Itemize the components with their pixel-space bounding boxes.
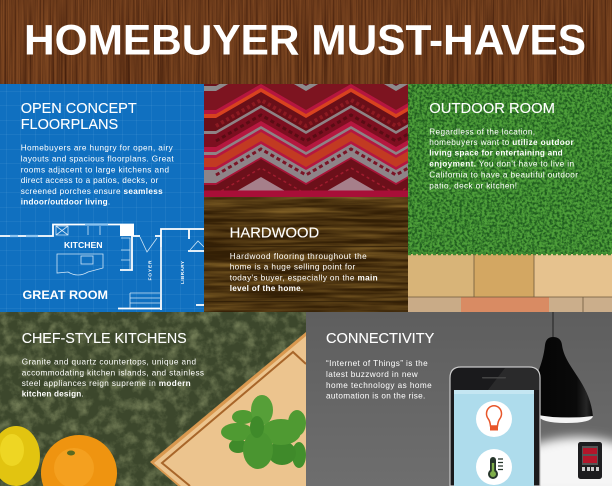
room labels: LIBRARY (180, 260, 186, 284)
panel: chef-style kitchens (0, 312, 306, 486)
room labels: GREAT ROOM (22, 290, 108, 302)
heading: CONNECTIVITY (326, 331, 435, 347)
smartphone (450, 367, 540, 486)
panel: patterned rug (171, 52, 576, 337)
body text: patio, deck or kitchen! (429, 181, 517, 190)
pendant lamp (530, 312, 612, 486)
body text (21, 144, 174, 207)
body text: enjoyment. You don't have to live in (429, 160, 574, 169)
smart thermostat (578, 442, 602, 479)
body text: accommodating kitchen islands, and stainless (22, 368, 204, 377)
body text: Granite and quartz countertops, unique and (22, 357, 196, 366)
body text: steel appliances reign supreme in modern (22, 379, 191, 388)
panel: hardwood (204, 197, 408, 312)
body text: homebuyers want to utilize outdoor (429, 138, 575, 147)
body text (429, 127, 578, 190)
body text: living space for entertaining and (429, 149, 563, 158)
panel: open concept floorplans (0, 84, 204, 312)
panel: outdoor room (408, 84, 612, 312)
body text: home is a huge selling point for (230, 263, 355, 272)
heading: OPEN CONCEPT (21, 101, 137, 117)
body text: kitchen design. (22, 390, 84, 399)
body text: rooms adjacent to large kitchens and (21, 165, 169, 174)
stone patio (408, 254, 612, 312)
body text: “Internet of Things” is the (326, 359, 428, 368)
body text: automation is on the rise. (326, 392, 425, 401)
heading: HARDWOOD (230, 225, 319, 241)
body text: indoor/outdoor living. (21, 198, 110, 207)
panel: connectivity (306, 312, 612, 486)
title: HOMEBUYER MUST-HAVES (24, 16, 586, 64)
basil leaves (221, 395, 306, 469)
heading: OUTDOOR ROOM (429, 101, 555, 117)
heading: CHEF-STYLE KITCHENS (22, 331, 187, 347)
body text: screened porches ensure seamless (21, 187, 163, 196)
body text: Homebuyers are hungry for open, airy (21, 144, 174, 153)
body text: latest buzzword in new (326, 370, 418, 379)
room labels: FOYER (148, 260, 154, 280)
room labels: KITCHEN (64, 241, 103, 250)
heading (21, 101, 137, 133)
body text (22, 357, 204, 399)
floorplan drawing (0, 224, 204, 310)
icon: thermometer (476, 449, 512, 485)
heading: FLOORPLANS (21, 117, 118, 133)
body text (230, 252, 378, 293)
cutting board (150, 332, 306, 486)
body text: California to have a beautiful outdoor (429, 170, 578, 179)
body text (326, 359, 432, 401)
header band (0, 0, 612, 84)
body text: home technology as home (326, 381, 432, 390)
body text: Regardless of the location, (429, 127, 535, 136)
room labels (22, 241, 186, 302)
body text: direct access to a patios, decks, or (21, 176, 158, 185)
lemon (0, 426, 40, 486)
orange (41, 435, 117, 486)
icon: light bulb (476, 401, 512, 437)
body text: layouts and spacious floorplans. Great (21, 154, 174, 164)
body text: level of the home. (230, 284, 303, 293)
body text: today's buyer, especially on the main (230, 273, 378, 282)
body text: Hardwood flooring throughout the (230, 252, 367, 261)
